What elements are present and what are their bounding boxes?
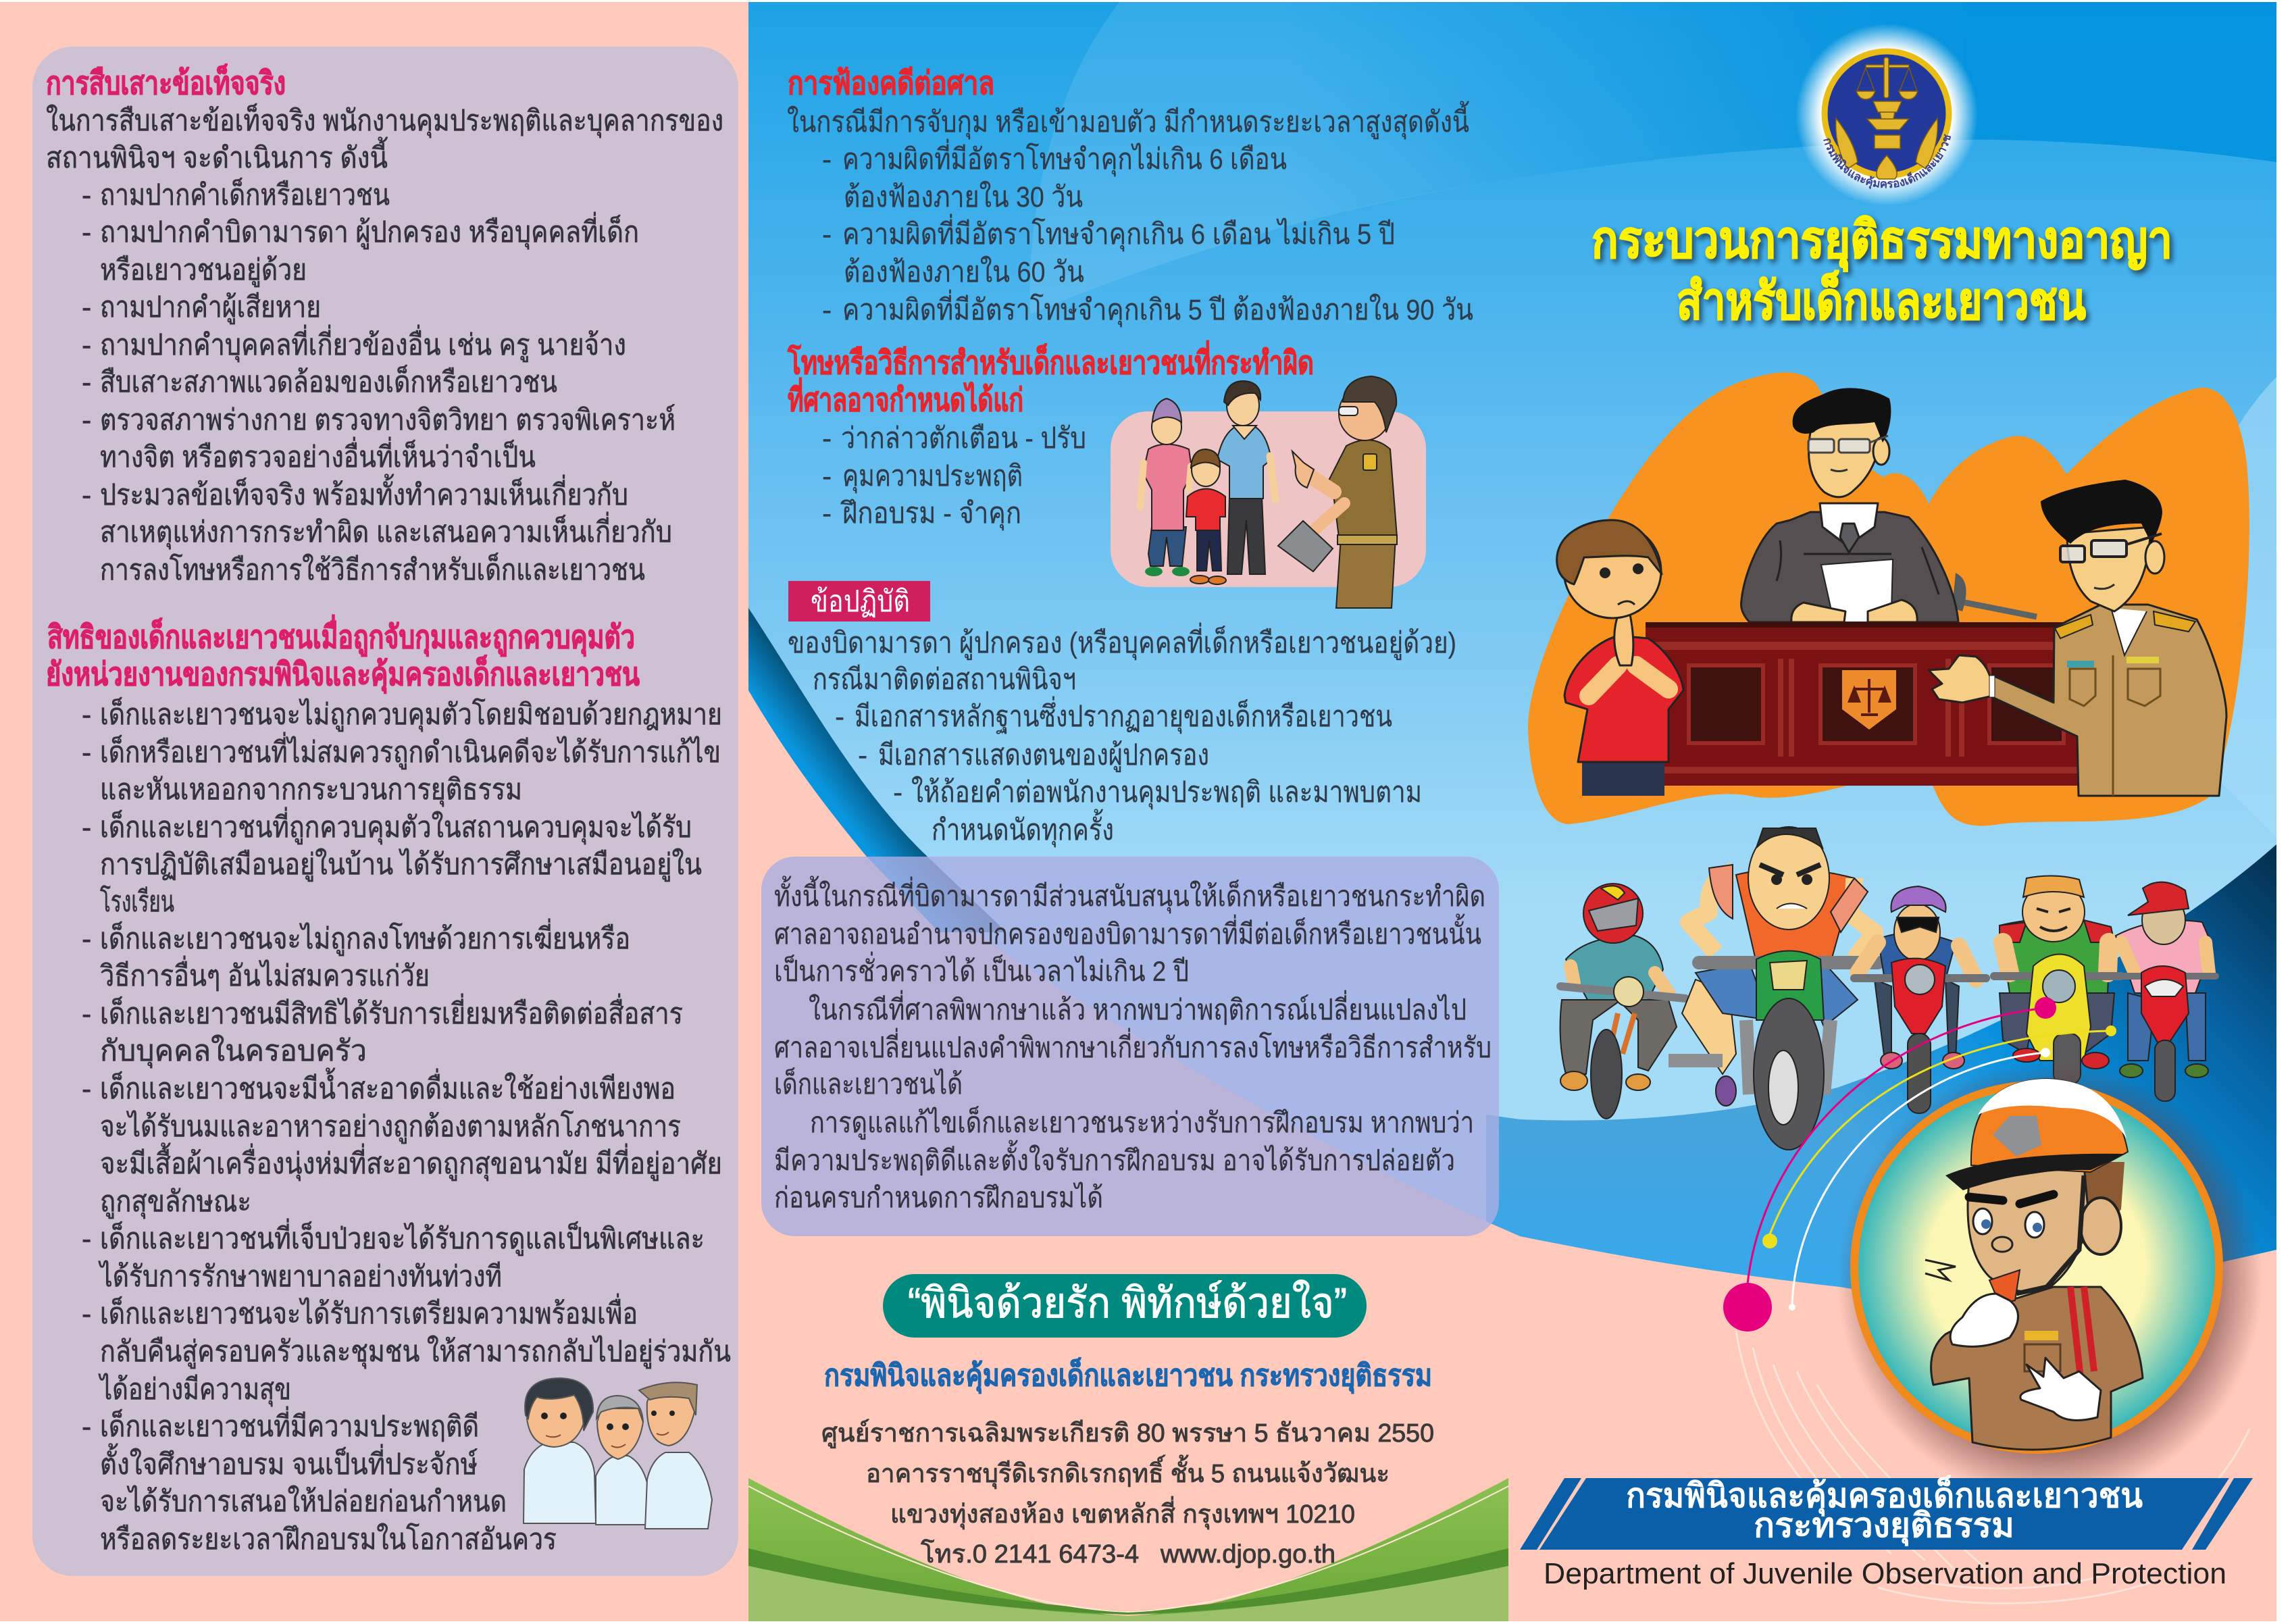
contact address: แขวงทุ่งสองห้อง เขตหลักสี่ กรุงเทพฯ 10210 <box>890 1496 1355 1529</box>
text block: rights list: ถูกสุขลักษณะ <box>100 1186 251 1219</box>
text block: prosecution deadlines <box>787 101 1473 328</box>
text block: rights list: กลับคืนสู่ครอบครัวและชุมชน ให้สามารถกลับไปอยู่ร่วมกัน <box>100 1335 731 1369</box>
figure: father <box>1217 381 1275 574</box>
heading: rights of children: สิทธิของเด็กและเยาวชนเมื่อถูกจับกุมและถูกควบคุมตัว <box>47 614 635 657</box>
court bench <box>1646 622 2079 786</box>
text block: parental duties: ให้ถ้อยคำต่อพนักงานคุมประพฤติ และมาพบตาม <box>911 776 1422 810</box>
judge collar and tie <box>1820 503 1878 553</box>
icon: scales <box>1836 57 1937 179</box>
panel: court discretion notes: ทั้งนี้ในกรณีที่บิดามารดามีส่วนสนับสนุนให้เด็กหรือเยาวชนกระทำผิด <box>774 876 1485 914</box>
text block: rights list: เด็กหรือเยาวชนที่ไม่สมควรถูกดำเนินคดีจะได้รับการแก้ไข <box>100 732 721 770</box>
text block: sanctions list: คุมความประพฤติ <box>842 460 1023 494</box>
panel: court discretion notes: มีความประพฤติดีและตั้งใจรับการฝึกอบรม อาจได้รับการปล่อยตัว <box>774 1140 1455 1176</box>
judge head <box>1793 388 1891 497</box>
text block: fact finding: ถามปากคำผู้เสียหาย <box>100 291 321 325</box>
text block: rights list: - <box>82 699 91 731</box>
heading: sanctions: ที่ศาลอาจกำหนดได้แก่ <box>788 377 1023 417</box>
text block: rights list: เด็กและเยาวชนที่ถูกควบคุมตัวในสถานควบคุมจะได้รับ <box>100 807 692 845</box>
text block: fact finding <box>46 103 723 586</box>
text block: fact finding: - <box>82 179 91 211</box>
text block: fact finding: ประมวลข้อเท็จจริง พร้อมทั้งทำความเห็นเกี่ยวกับ <box>100 474 628 511</box>
title <box>1591 211 2172 330</box>
officer helmet <box>1945 1079 2128 1190</box>
text block: fact finding: ในการสืบเสาะข้อเท็จจริง พนักงานคุมประพฤติและบุคลากรของ <box>46 103 723 138</box>
english department name: Department of Juvenile Observation and Protection <box>1544 1557 2226 1590</box>
text block: fact finding: ทางจิต หรือตรวจอย่างอื่นที่เห็นว่าจำเป็น <box>100 437 536 474</box>
heading: sanctions <box>787 340 1314 417</box>
panel: court discretion notes <box>761 857 1499 1236</box>
text block: rights list: เด็กและเยาวชนมีสิทธิได้รับการเยี่ยมหรือติดต่อสื่อสาร <box>100 994 683 1030</box>
dots at arc ends <box>1723 997 2116 1331</box>
text block: rights list: ตั้งใจศึกษาอบรม จนเป็นที่ประจักษ์ <box>100 1443 478 1481</box>
text block: rights list: เด็กและเยาวชนจะไม่ถูกควบคุมตัวโดยมิชอบด้วยกฎหมาย <box>100 697 722 732</box>
panel: court discretion notes: ศาลอาจเปลี่ยนแปลงคำพิพากษาเกี่ยวกับการลงโทษหรือวิธีการสำหรับ <box>774 1028 1492 1063</box>
text block: prosecution deadlines: ต้องฟ้องภายใน 60 วัน <box>844 255 1084 288</box>
text block: rights list: ได้อย่างมีความสุข <box>98 1373 291 1407</box>
whistle and gloves <box>1925 1260 2101 1420</box>
text block: fact finding: สืบเสาะสภาพแวดล้อมของเด็กหรือเยาวชน <box>100 365 557 399</box>
badge: duties <box>788 581 930 621</box>
text block: fact finding: ถามปากคำเด็กหรือเยาวชน <box>100 178 390 211</box>
illustration: judge at bench <box>1646 388 2079 786</box>
badge: duties: ข้อปฏิบัติ <box>811 585 910 618</box>
text block: rights list: - <box>82 811 91 844</box>
text block: sanctions list: ฝึกอบรม - จำคุก <box>840 497 1021 531</box>
contact address: อาคารราชบุรีดิเรกดิเรกฤทธิ์ ชั้น 5 ถนนแจ้งวัฒนะ <box>866 1454 1390 1489</box>
text block: fact finding: - <box>82 291 91 324</box>
text block: fact finding: หรือเยาวชนอยู่ด้วย <box>100 254 307 288</box>
text block: parental duties <box>788 623 1456 848</box>
text block: rights list: จะได้รับการเสนอให้ปล่อยก่อนกำหนด <box>100 1485 507 1518</box>
text block: fact finding: ถามปากคำบุคคลที่เกี่ยวข้องอื่น เช่น ครู นายจ้าง <box>100 325 626 363</box>
text block: rights list: - <box>82 1223 91 1255</box>
text block: rights list: - <box>82 1298 91 1330</box>
panel: court discretion notes: ก่อนครบกำหนดการฝึกอบรมได้ <box>774 1182 1103 1213</box>
text block: fact finding: สถานพินิจฯ จะดำเนินการ ดังนี้ <box>46 136 388 174</box>
slogan pill: “พินิจด้วยรัก พิทักษ์ด้วยใจ” <box>908 1279 1347 1327</box>
heading: rights of children: ยังหน่วยงานของกรมพินิจและคุ้มครองเด็กและเยาวชน <box>46 654 640 694</box>
text block: rights list: เด็กและเยาวชนที่เจ็บป่วยจะได้รับการดูแลเป็นพิเศษและ <box>100 1219 705 1257</box>
text block: fact finding: - <box>82 479 91 511</box>
text block: fact finding: - <box>82 216 91 249</box>
text block: fact finding: ตรวจสภาพร่างกาย ตรวจทางจิตวิทยา ตรวจพิเคราะห์ <box>100 404 676 436</box>
orange blobs behind court <box>1528 372 2249 826</box>
rider: angry orange shirt, green bike <box>1669 827 1878 1150</box>
text block: sanctions list: - <box>822 497 832 530</box>
heading: rights of children <box>46 614 640 694</box>
panel: left column fact finding and rights <box>32 47 738 1576</box>
figure: mother <box>1140 399 1192 576</box>
illustration: family with probation officer <box>1111 376 1426 608</box>
judge paper and hands <box>1791 559 1917 622</box>
text block: parental duties: ของบิดามารดา ผู้ปกครอง (หรือบุคคลที่เด็กหรือเยาวชนอยู่ด้วย) <box>788 623 1456 661</box>
rider: green shirt, yellow scooter <box>1994 876 2121 1084</box>
text block: rights list: หรือลดระยะเวลาฝึกอบรมในโอกาสอันควร <box>100 1523 557 1556</box>
title: สำหรับเด็กและเยาวชน <box>1677 270 2086 330</box>
banner: department name <box>1520 1475 2253 1550</box>
text block: rights list: กับบุคคลในครอบครัว <box>100 1034 367 1069</box>
panel: court discretion notes: เด็กและเยาวชนได้ <box>774 1067 963 1100</box>
text block: fact finding: - <box>82 366 91 399</box>
text block: parental duties: กรณีมาติดต่อสถานพินิจฯ <box>813 663 1076 696</box>
text block: prosecution deadlines: ความผิดที่มีอัตราโทษจำคุกไม่เกิน 6 เดือน <box>842 139 1287 177</box>
text block: fact finding: - <box>82 404 91 436</box>
bench shield emblem <box>1842 670 1896 730</box>
text block: rights list: - <box>82 736 91 769</box>
text block: sanctions list: ว่ากล่าวตักเตือน - ปรับ <box>841 422 1086 455</box>
text block: rights list: - <box>82 1073 91 1105</box>
text block: prosecution deadlines: ความผิดที่มีอัตราโทษจำคุกเกิน 5 ปี ต้องฟ้องภายใน 90 วัน <box>842 290 1473 328</box>
figure: child <box>1186 449 1226 584</box>
banner: department name: กระทรวงยุติธรรม <box>1754 1506 2014 1546</box>
title: กระบวนการยุติธรรมทางอาญา <box>1591 211 2172 272</box>
rider: purple hair, red bike <box>1854 886 1986 1113</box>
illustration: three youths in white shirts <box>524 1378 712 1529</box>
organisation name: กรมพินิจและคุ้มครองเด็กและเยาวชน กระทรวงยุติธรรม <box>824 1357 1432 1394</box>
text block: parental duties: - <box>835 701 844 733</box>
panel: court discretion notes: เป็นการชั่วคราวได้ เป็นเวลาไม่เกิน 2 ปี <box>774 952 1189 987</box>
text block: rights list: โรงเรียน <box>100 885 174 918</box>
text block: rights list: และหันเหออกจากกระบวนการยุติธรรม <box>100 773 522 807</box>
text block: rights list: เด็กและเยาวชนจะไม่ถูกลงโทษด้วยการเฆี่ยนหรือ <box>100 919 630 957</box>
officer uniform <box>1931 1287 2143 1450</box>
text block: rights list: จะได้รับนมและอาหารอย่างถูกต้องตามหลักโภชนาการ <box>100 1110 681 1144</box>
text block: rights list <box>82 697 731 1556</box>
officer head <box>1968 1162 2124 1294</box>
text block: rights list: วิธีการอื่นๆ อันไม่สมควรแก่วัย <box>100 956 430 992</box>
text block: parental duties: มีเอกสารหลักฐานซึ่งปรากฏอายุของเด็กหรือเยาวชน <box>855 696 1392 734</box>
illustration: khaki officer presenting <box>1929 480 2226 796</box>
text block: rights list: - <box>82 1411 91 1443</box>
text block: rights list: จะมีเสื้อผ้าเครื่องนุ่งห่มที่สะอาดถูกสุขอนามัย มีที่อยู่อาศัย <box>100 1142 722 1182</box>
text block: prosecution deadlines: - <box>822 294 832 326</box>
text block: rights list: - <box>82 998 91 1030</box>
contact address <box>821 1419 1434 1569</box>
text block: parental duties: มีเอกสารแสดงตนของผู้ปกครอง <box>878 739 1209 773</box>
illustration: traffic officer medallion <box>1837 1061 2263 1500</box>
text block: rights list: เด็กและเยาวชนจะมีน้ำสะอาดดื่มและใช้อย่างเพียงพอ <box>100 1067 676 1105</box>
contact address: ศูนย์ราชการเฉลิมพระเกียรติ 80 พรรษา 5 ธันวาคม 2550 <box>821 1419 1434 1448</box>
contact address: โทร.0 2141 6473-4 www.djop.go.th <box>921 1539 1335 1569</box>
heading: prosecution: การฟ้องคดีต่อศาล <box>788 65 994 101</box>
text block: rights list: การปฏิบัติเสมือนอยู่ในบ้าน ได้รับการศึกษาเสมือนอยู่ใน <box>100 848 702 882</box>
panel: court discretion notes: การดูแลแก้ไขเด็กและเยาวชนระหว่างรับการฝึกอบรม หากพบว่า <box>810 1106 1474 1140</box>
logo: department seal <box>1797 24 1977 205</box>
illustration: praying boy <box>1557 520 1683 796</box>
text block: prosecution deadlines: ต้องฟ้องภายใน 30 วัน <box>844 180 1083 213</box>
panel: court discretion notes: ในกรณีที่ศาลพิพากษาแล้ว หากพบว่าพฤติการณ์เปลี่ยนแปลงไป <box>809 990 1467 1025</box>
text block: sanctions list: - <box>822 460 832 492</box>
heading: sanctions: โทษหรือวิธีการสำหรับเด็กและเยาวชนที่กระทำผิด <box>787 340 1314 380</box>
illustration: motorcycle riders <box>1560 827 2216 1150</box>
text block: rights list: ได้รับการรักษาพยาบาลอย่างทันท่วงที <box>98 1260 502 1293</box>
text block: rights list: เด็กและเยาวชนจะได้รับการเตรียมความพร้อมเพื่อ <box>100 1294 638 1330</box>
text block: rights list: เด็กและเยาวชนที่มีความประพฤติดี <box>100 1406 479 1443</box>
text block: prosecution deadlines: - <box>822 143 832 176</box>
text block: sanctions list <box>822 422 1086 531</box>
text block: parental duties: - <box>893 776 902 809</box>
text block: fact finding: ถามปากคำบิดามารดา ผู้ปกครอง หรือบุคคลที่เด็ก <box>100 212 639 250</box>
green wave footer <box>748 1478 1508 1621</box>
heading: fact finding: การสืบเสาะข้อเท็จจริง <box>46 63 286 101</box>
text block: fact finding: สาเหตุแห่งการกระทำผิด และเสนอความเห็นเกี่ยวกับ <box>100 512 672 550</box>
text block: prosecution deadlines: ความผิดที่มีอัตราโทษจำคุกเกิน 6 เดือน ไม่เกิน 5 ปี <box>842 214 1395 252</box>
text block: rights list: - <box>82 923 91 955</box>
text block: fact finding: - <box>82 329 91 361</box>
judge robe <box>1741 512 1958 622</box>
figure: officer with folder <box>1278 376 1397 608</box>
text block: parental duties: - <box>858 739 867 771</box>
gavel <box>1952 573 2037 617</box>
panel: prosecution text and sanctions <box>787 65 1473 848</box>
panel: court discretion notes: ศาลอาจถอนอำนาจปกครองของบิดามารดาที่มีต่อเด็กหรือเยาวชนนั้น <box>774 913 1481 950</box>
text block: prosecution deadlines: - <box>822 218 832 251</box>
text block: parental duties: กำหนดนัดทุกครั้ง <box>932 809 1114 848</box>
rider: red helmet, teal shirt <box>1560 884 1685 1119</box>
rider: red cap, floral shirt <box>2114 882 2216 1101</box>
decorative arcs <box>1748 1008 2111 1304</box>
text block: prosecution deadlines: ในกรณีมีการจับกุม หรือเข้ามอบตัว มีกำหนดระยะเวลาสูงสุดดังนี้ <box>787 101 1469 140</box>
text block: fact finding: การลงโทษหรือการใช้วิธีการสำหรับเด็กและเยาวชน <box>100 553 645 586</box>
text block: sanctions list: - <box>822 422 832 455</box>
banner: department name: กรมพินิจและคุ้มครองเด็กและเยาวชน <box>1626 1475 2143 1517</box>
slogan pill <box>883 1274 1367 1338</box>
